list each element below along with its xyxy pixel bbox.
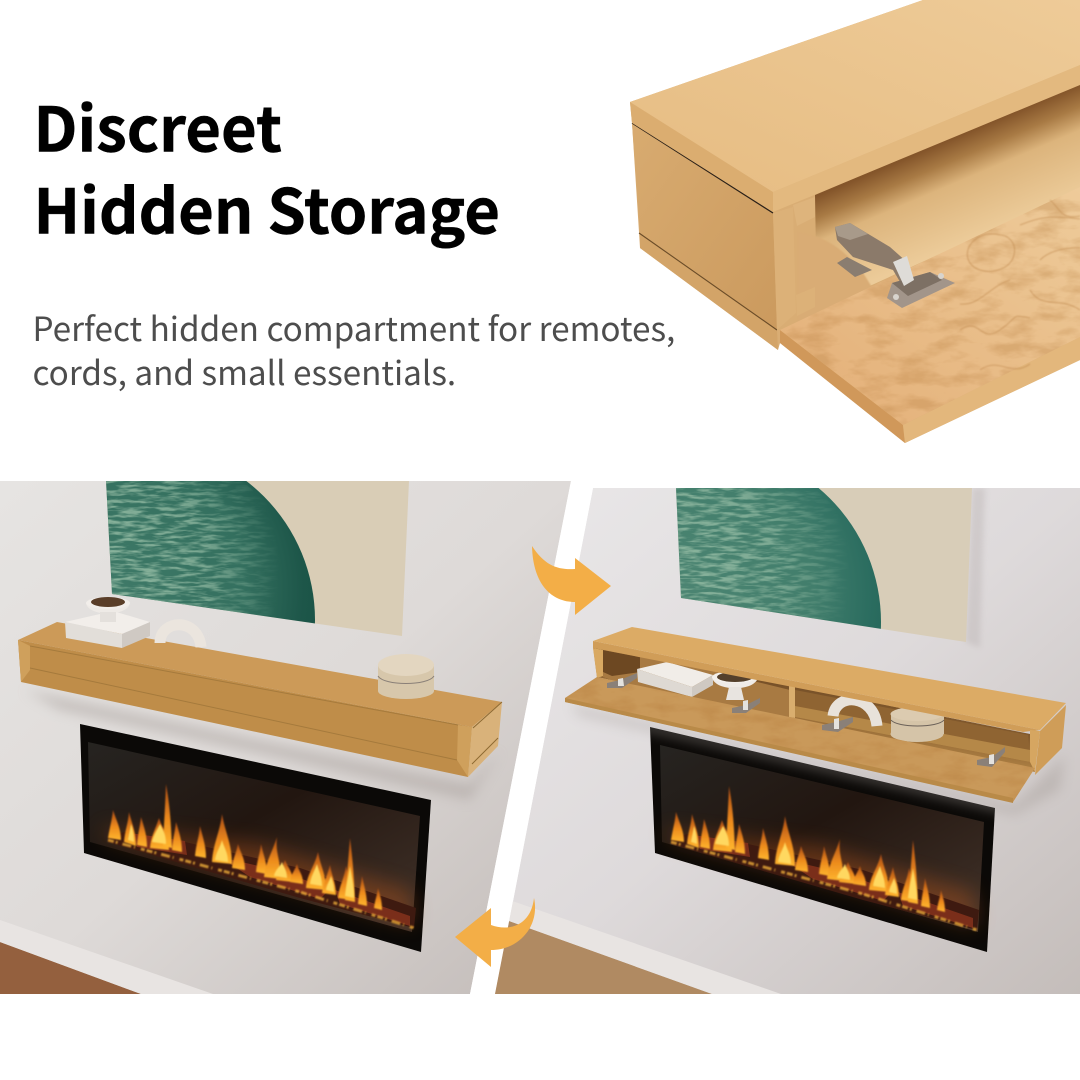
subtitle text block: cords, and small essentials. xyxy=(32,346,456,395)
arch ornament xyxy=(160,625,201,647)
silhouette base xyxy=(630,0,1080,443)
mantel shelf xyxy=(18,622,502,777)
title xyxy=(34,80,500,252)
lid front edge xyxy=(630,102,773,212)
top board surface xyxy=(593,627,1066,730)
baseboard xyxy=(0,920,213,994)
arch ornament xyxy=(833,700,877,726)
cavity back wall xyxy=(815,83,1080,310)
floor xyxy=(495,916,712,994)
decorative round box xyxy=(890,707,944,742)
title: Discreet xyxy=(34,80,282,170)
decorative round box xyxy=(378,654,434,699)
side block of mantel xyxy=(632,123,777,330)
books xyxy=(65,611,150,648)
lid top surface xyxy=(630,0,1080,192)
top board front edge xyxy=(593,641,1040,732)
cavity floor shadow xyxy=(797,232,880,335)
front upright xyxy=(773,207,796,330)
cavity interior xyxy=(593,646,1035,772)
photo: mantel closed xyxy=(0,445,571,994)
wall xyxy=(0,481,571,994)
floor xyxy=(0,942,141,994)
fireplace xyxy=(80,724,431,952)
title: Hidden Storage xyxy=(34,162,500,252)
hinge xyxy=(835,223,955,308)
door panel thickness xyxy=(780,330,905,443)
product close-up: open mantel compartment with hinge xyxy=(630,0,1080,443)
subtitle text block: Perfect hidden compartment for remotes, xyxy=(32,302,675,351)
arrow: open direction xyxy=(532,546,611,615)
subtitle text block xyxy=(32,302,675,395)
door wood grain xyxy=(960,200,1080,370)
fireplace xyxy=(650,727,995,952)
artwork xyxy=(676,488,985,646)
end post and divider xyxy=(593,648,603,678)
photo: mantel open xyxy=(495,447,1080,994)
artwork xyxy=(106,481,409,636)
door panel face xyxy=(780,187,1080,425)
arrow: close direction xyxy=(455,898,535,967)
bowl xyxy=(86,597,130,622)
hinges xyxy=(607,673,1005,767)
mantel shadow on wall xyxy=(570,705,1065,815)
baseboard xyxy=(509,902,780,994)
wall xyxy=(495,488,1080,994)
side block xyxy=(1035,705,1066,775)
open mantel shelf xyxy=(565,627,1066,803)
bowl xyxy=(712,671,758,700)
books xyxy=(637,662,713,697)
mantel shadow on wall xyxy=(25,690,500,800)
drop-down door xyxy=(565,677,1035,802)
